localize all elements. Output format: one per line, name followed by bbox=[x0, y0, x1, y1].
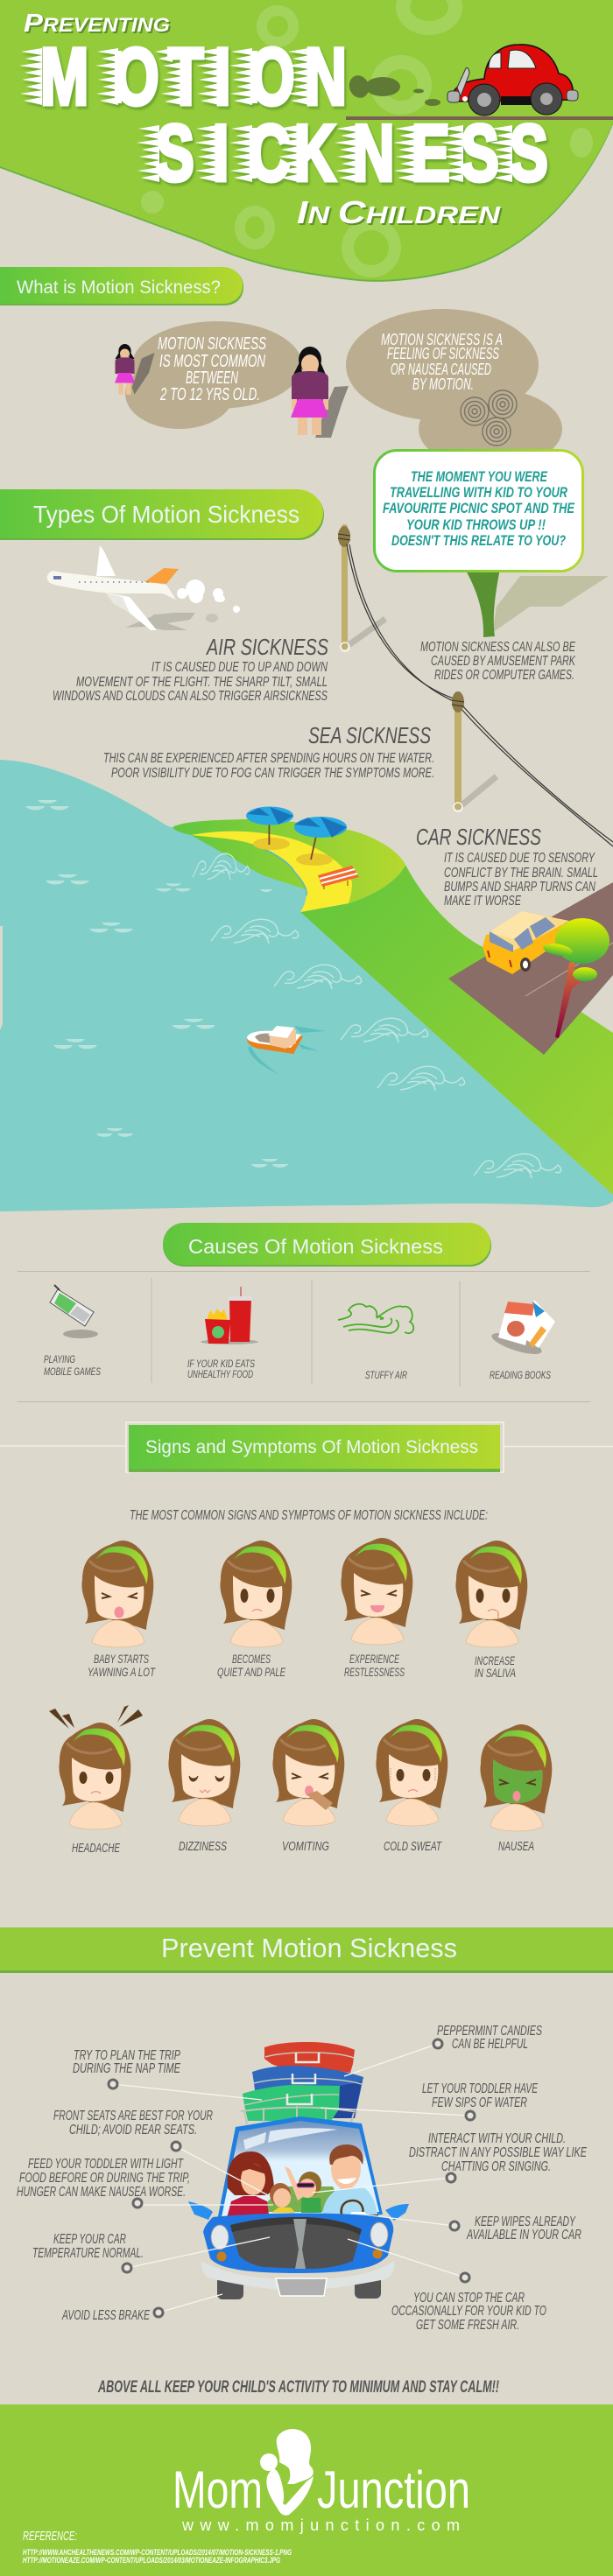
text: air sickness: AIR SICKNESS bbox=[205, 634, 328, 660]
sign: experience restlessness: EXPERIENCE bbox=[349, 1652, 399, 1666]
sign: increase in saliva: IN SALIVA bbox=[475, 1666, 516, 1680]
cause: mobile games: MOBILE GAMES bbox=[44, 1365, 101, 1378]
tips text: CHATTING OR SINGING. bbox=[441, 2159, 551, 2174]
bubble: age range: MOTION SICKNESS bbox=[158, 334, 266, 354]
tips text: KEEP YOUR CAR bbox=[53, 2232, 126, 2247]
logo: momjunction: www.momjunction.com bbox=[181, 2516, 460, 2534]
road line bbox=[346, 116, 613, 120]
sign: cold sweat: COLD SWEAT bbox=[384, 1839, 442, 1854]
scene: beach bbox=[173, 819, 405, 912]
callout tail shadow bbox=[492, 576, 609, 633]
icon: beach chair bbox=[318, 866, 359, 889]
callout leader lines bbox=[113, 2044, 470, 2313]
sign: increase in saliva bbox=[455, 1541, 527, 1680]
tips text: GET SOME FRESH AIR. bbox=[416, 2318, 519, 2333]
scene: sea bbox=[0, 760, 613, 1211]
luggage stack bbox=[241, 2042, 363, 2125]
text: air sickness: WINDOWS AND CLOUDS CAN ALSO TRIGGER AIRSICKNESS bbox=[53, 689, 328, 704]
logo: momjunction bbox=[173, 2429, 470, 2534]
cause: stuffy air bbox=[338, 1304, 413, 1381]
utility pole two bbox=[452, 691, 497, 811]
sign: dizziness bbox=[168, 1719, 240, 1854]
sign: headache bbox=[49, 1705, 143, 1856]
headlights bbox=[211, 2225, 229, 2250]
children bbox=[270, 2166, 321, 2213]
sign: baby starts yawning a lot bbox=[81, 1541, 156, 1679]
title: in children: IN CHILDREN bbox=[297, 194, 501, 230]
heading band: prevent motion sickness: Prevent Motion Sickness bbox=[161, 1933, 457, 1963]
sign: becomes quiet and pale bbox=[217, 1541, 292, 1679]
title: preventing: PREVENTING bbox=[24, 10, 170, 38]
bubble: definition: FEELING OF SICKNESS bbox=[387, 345, 499, 362]
cause: mobile games: PLAYING bbox=[44, 1353, 75, 1365]
cause: unhealthy food: UNHEALTHY FOOD bbox=[187, 1368, 253, 1380]
logo: momjunction: Junction bbox=[317, 2460, 470, 2519]
heading: signs and symptoms bbox=[0, 1422, 613, 1472]
cause: mobile games bbox=[44, 1285, 101, 1378]
cause: reading books bbox=[490, 1300, 555, 1381]
heading: causes of motion sickness: Causes Of Motion Sickness bbox=[188, 1235, 443, 1258]
text: air sickness bbox=[53, 634, 328, 704]
utility pole one bbox=[338, 524, 385, 651]
text: sea sickness: THIS CAN BE EXPERIENCED AFTER SPENDING HOURS ON THE WATER. bbox=[103, 751, 434, 766]
text: car sickness bbox=[416, 824, 598, 909]
mother bbox=[226, 2151, 274, 2222]
tips text: CHILD; AVOID REAR SEATS. bbox=[69, 2123, 197, 2137]
tips text: FEED YOUR TODDLER WITH LIGHT bbox=[28, 2157, 184, 2172]
tips text: FEW SIPS OF WATER bbox=[432, 2095, 527, 2110]
cause: unhealthy food bbox=[187, 1287, 258, 1380]
bubble: definition: BY MOTION. bbox=[412, 376, 474, 393]
dashboard bbox=[324, 2215, 378, 2223]
text: air sickness: MOVEMENT OF THE FLIGHT. THE SHARP TILT, SMALL bbox=[76, 675, 328, 690]
number plate bbox=[276, 2278, 327, 2296]
sign: baby starts yawning a lot: BABY STARTS bbox=[94, 1652, 149, 1666]
sign: headache: HEADACHE bbox=[72, 1841, 121, 1856]
bubble: age range: BETWEEN bbox=[186, 369, 238, 388]
sign: dizziness: DIZZINESS bbox=[179, 1839, 227, 1854]
steering wheel bbox=[342, 2200, 363, 2215]
sign: cold sweat bbox=[376, 1719, 447, 1854]
sign: increase in saliva: INCREASE bbox=[475, 1653, 515, 1667]
scene: road bbox=[448, 882, 613, 1055]
sign: nausea: NAUSEA bbox=[498, 1839, 534, 1854]
icon: tree bbox=[542, 918, 609, 1038]
heading: types of motion sickness: Types Of Motion Sickness bbox=[33, 501, 299, 528]
exhaust smoke bbox=[346, 73, 440, 106]
father bbox=[322, 2144, 377, 2215]
callout box: THE MOMENT YOU WERE bbox=[411, 468, 547, 485]
heading: signs and symptoms: Signs and Symptoms Of Motion Sickness bbox=[145, 1437, 478, 1457]
illustration: family car with luggage bbox=[188, 2042, 409, 2299]
references: HTTP://WWW.AHCHEALTHENEWS.COM/WP-CONTENT/UPLOADS/2014/07/MOTION-SICKNESS-1.PNG bbox=[23, 2548, 292, 2557]
back seat bbox=[263, 2186, 346, 2212]
callout box: YOUR KID THROWS UP !! bbox=[406, 516, 546, 533]
bumper bbox=[201, 2261, 395, 2291]
causes grid dividers bbox=[18, 1271, 590, 1402]
tips text: YOU CAN STOP THE CAR bbox=[413, 2291, 525, 2306]
references: REFERENCE: bbox=[23, 2529, 77, 2544]
scene: land band bbox=[300, 865, 613, 1195]
sign: becomes quiet and pale: BECOMES bbox=[232, 1652, 271, 1666]
sign: experience restlessness: RESTLESSNESS bbox=[344, 1665, 405, 1679]
sign: nausea bbox=[480, 1724, 552, 1854]
hood bbox=[203, 2213, 393, 2273]
text: sea sickness: SEA SICKNESS bbox=[308, 722, 431, 748]
tips text: CAN BE HELPFUL bbox=[452, 2037, 528, 2052]
tips text: FOOD BEFORE OR DURING THE TRIP, bbox=[19, 2171, 190, 2186]
mirrors bbox=[188, 2201, 213, 2220]
tips text: FRONT SEATS ARE BEST FOR YOUR bbox=[53, 2109, 213, 2123]
bubble: age range: IS MOST COMMON bbox=[159, 352, 265, 371]
logo: momjunction: Mom bbox=[173, 2460, 263, 2519]
bubble: definition: OR NAUSEA CAUSED bbox=[391, 361, 491, 378]
bubble: definition: MOTION SICKNESS IS A bbox=[381, 331, 503, 348]
sea foam marks bbox=[25, 800, 288, 1168]
tips text: PEPPERMINT CANDIES bbox=[437, 2024, 542, 2039]
tips text: TEMPERATURE NORMAL. bbox=[32, 2246, 144, 2261]
tips text: HUNGER CAN MAKE NAUSEA WORSE. bbox=[17, 2185, 186, 2200]
text: amusement park note bbox=[420, 640, 576, 683]
text: car sickness: CAR SICKNESS bbox=[416, 824, 541, 850]
sea waves bbox=[193, 853, 561, 1178]
heading: causes of motion sickness bbox=[163, 1223, 491, 1267]
references bbox=[23, 2529, 292, 2565]
tips text: DURING THE NAP TIME bbox=[73, 2061, 180, 2076]
icon: yellow car bbox=[483, 911, 569, 974]
tips text: AVOID LESS BRAKE bbox=[61, 2308, 150, 2323]
sign: baby starts yawning a lot: YAWNING A LOT bbox=[88, 1665, 156, 1679]
grille bbox=[230, 2217, 362, 2269]
text: car sickness: MAKE IT WORSE bbox=[444, 894, 521, 909]
car cabin bbox=[217, 2116, 383, 2221]
cause: reading books: READING BOOKS bbox=[490, 1369, 551, 1381]
icon: dizzy spirals bbox=[461, 390, 517, 446]
wires bbox=[347, 544, 613, 846]
cause: stuffy air: STUFFY AIR bbox=[365, 1369, 407, 1381]
sign: experience restlessness bbox=[341, 1538, 412, 1679]
title: motion: MOTION bbox=[40, 31, 347, 122]
callout tail bbox=[465, 569, 500, 637]
tips text: LET YOUR TODDLER HAVE bbox=[422, 2081, 538, 2096]
cause: unhealthy food: IF YOUR KID EATS bbox=[187, 1358, 255, 1370]
icon: large girl bbox=[291, 347, 349, 438]
tips text bbox=[17, 2024, 587, 2333]
icon: boat bbox=[247, 1026, 326, 1075]
icon: small girl bbox=[115, 344, 155, 395]
heading band: prevent motion sickness bbox=[0, 1927, 613, 1973]
heading: what is motion sickness: What is Motion Sickness? bbox=[17, 277, 221, 298]
callout dots bbox=[109, 2039, 475, 2317]
text: sea sickness bbox=[103, 722, 434, 781]
heading: what is motion sickness bbox=[0, 267, 243, 305]
wheels bbox=[217, 2276, 243, 2299]
bubble: age range bbox=[125, 321, 302, 429]
bubble: definition bbox=[346, 309, 562, 469]
text: air sickness: IT IS CAUSED DUE TO UP AND DOWN bbox=[151, 660, 328, 675]
icon: airplane bbox=[47, 545, 240, 630]
references: HTTP://MOTIONEAZE.COM/WP-CONTENT/UPLOADS/2014/03/MOTIONEAZE-INFOGRAPHIC3.JPG bbox=[23, 2556, 280, 2565]
icon: red car bbox=[447, 45, 578, 116]
bubble: age range: 2 TO 12 YRS OLD. bbox=[159, 385, 260, 404]
sign: vomiting bbox=[272, 1719, 344, 1854]
tips text: TRY TO PLAN THE TRIP bbox=[74, 2048, 180, 2063]
sign: becomes quiet and pale: QUIET AND PALE bbox=[217, 1665, 285, 1679]
title: sickness: SICKNESS bbox=[156, 108, 548, 198]
sign: vomiting: VOMITING bbox=[282, 1839, 329, 1854]
callout box bbox=[375, 450, 583, 571]
footer band bbox=[0, 2404, 613, 2576]
header banner bbox=[0, 0, 613, 282]
text: sea sickness: POOR VISIBILITY DUE TO FOG CAN TRIGGER THE SYMPTOMS MORE. bbox=[111, 766, 434, 781]
icon: beach umbrellas bbox=[246, 807, 347, 866]
heading: types of motion sickness bbox=[0, 489, 324, 540]
